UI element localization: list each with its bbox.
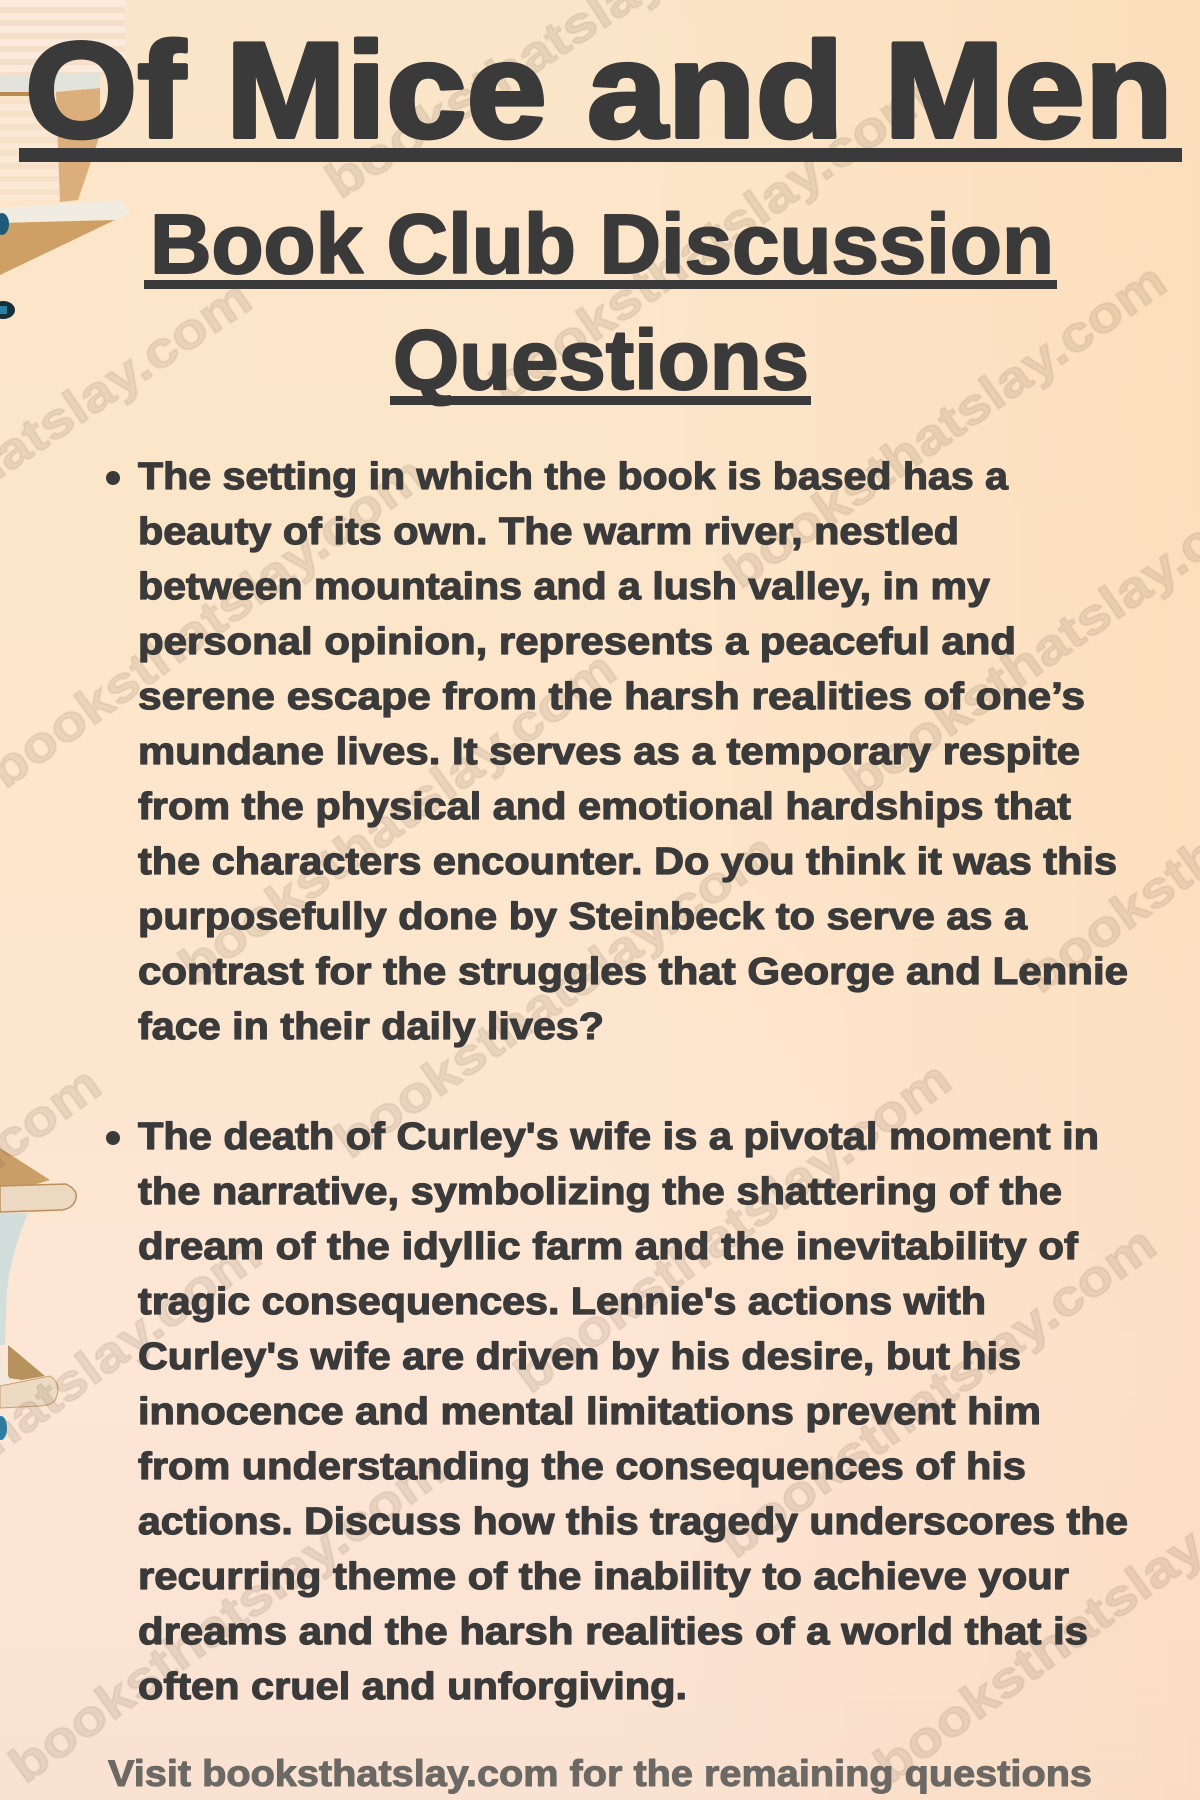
image: stacked books, top left [0, 0, 130, 319]
subtitle [144, 197, 1057, 407]
watermarks: booksthatslay.com [169, 640, 626, 994]
discussion question 1 [106, 456, 1128, 1048]
question 2 text: The death of Curley's wife is a pivotal moment in [138, 1116, 1099, 1158]
watermarks: booksthatslay.com [504, 1050, 961, 1404]
question 2 text: actions. Discuss how this tragedy underscores the [138, 1501, 1128, 1543]
watermarks: booksthatslay.com [479, 67, 941, 414]
question 1 text: face in their daily lives? [138, 1006, 604, 1048]
question 2 text: dream of the idyllic farm and the inevitability of [138, 1226, 1078, 1268]
question 1 text: The setting in which the book is based has a [138, 456, 1009, 498]
question 1 text: the characters encounter. Do you think it was this [138, 841, 1117, 883]
question 2 text: dreams and the harsh realities of a world that is [138, 1611, 1088, 1653]
question 2 text: tragic consequences. Lennie's actions with [138, 1281, 986, 1323]
footer call to action: Visit booksthatslay.com for the remaining questions [108, 1753, 1092, 1794]
image: stacked books, lower left [0, 1148, 76, 1440]
watermarks: booksthatslay.com [0, 1440, 456, 1794]
discussion question 2 [106, 1116, 1128, 1708]
question 2 text: innocence and mental limitations prevent him [138, 1391, 1041, 1433]
question 1 text: beauty of its own. The warm river, nestled [138, 511, 959, 553]
bullet 1 [106, 471, 120, 485]
subtitle: Book Club Discussion [150, 197, 1054, 291]
question 2 text: often cruel and unforgiving. [138, 1666, 687, 1708]
question 2 text: the narrative, symbolizing the shattering of the [138, 1171, 1062, 1213]
question 2 text: from understanding the consequences of his [138, 1446, 1026, 1488]
question 2 text [138, 1116, 1128, 1708]
question 1 text: mundane lives. It serves as a temporary respite [138, 731, 1080, 773]
bullet 2 [106, 1131, 120, 1145]
watermarks: booksthatslay.com [324, 822, 786, 1169]
question 1 text [138, 456, 1128, 1048]
question 1 text: personal opinion, represents a peaceful and [138, 621, 1016, 663]
question 1 text: contrast for the struggles that George and Lennie [138, 951, 1128, 993]
question 1 text: between mountains and a lush valley, in my [138, 566, 990, 608]
question 1 text: purposefully done by Steinbeck to serve as a [138, 896, 1028, 938]
subtitle: Questions [393, 313, 809, 407]
question 1 text: from the physical and emotional hardships that [138, 786, 1071, 828]
watermarks: booksthatslay.com [714, 252, 1176, 599]
question 2 text: recurring theme of the inability to achieve your [138, 1556, 1069, 1598]
question 1 text: serene escape from the harsh realities of one’s [138, 676, 1085, 718]
title: Of Mice and Men [25, 14, 1173, 166]
watermarks: booksthatslay.com [709, 1215, 1166, 1569]
question 2 text: Curley's wife are driven by his desire, but his [138, 1336, 1021, 1378]
